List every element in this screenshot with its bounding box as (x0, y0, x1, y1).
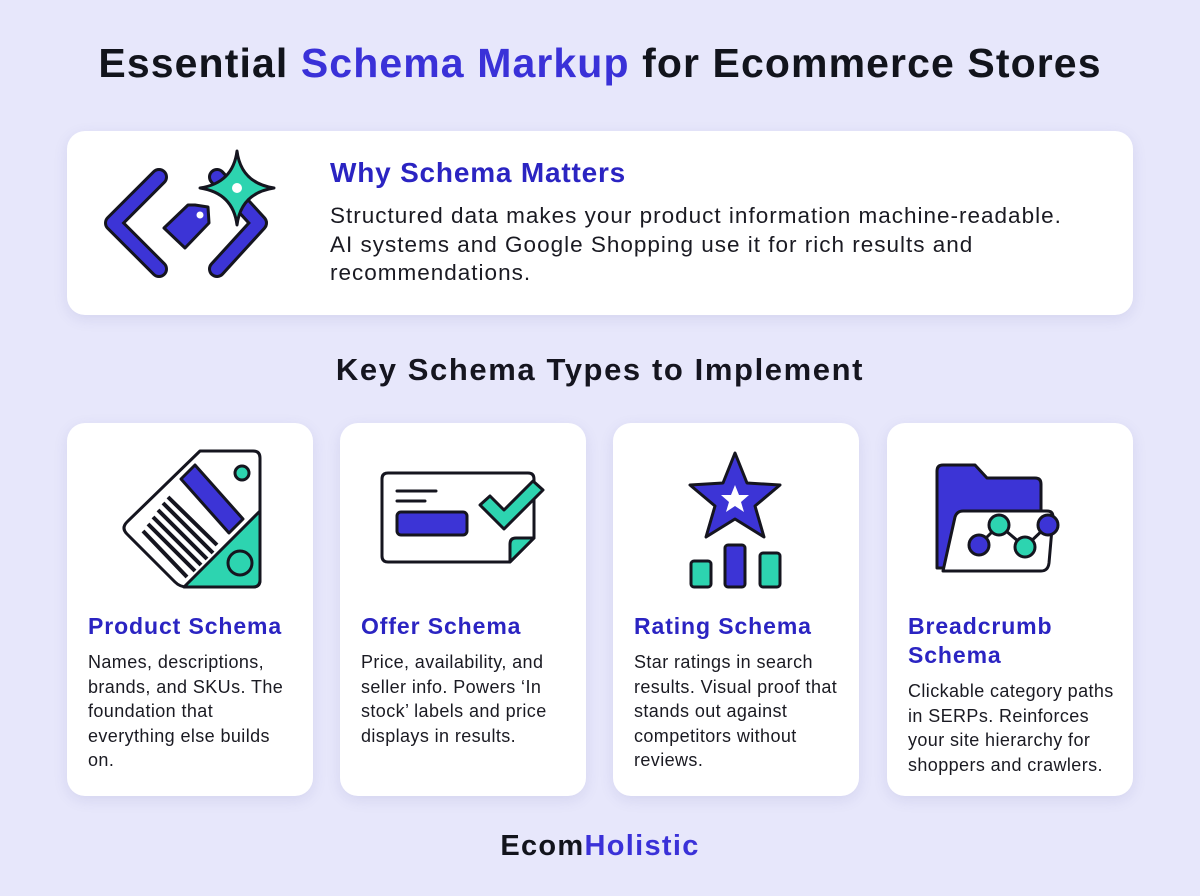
footer brand: EcomHolistic (500, 830, 700, 862)
heading: Breadcrumb Schema (908, 613, 1052, 668)
title: Essential Schema Markup for Ecommerce Stores (98, 40, 1102, 86)
card: rating schema (613, 423, 859, 796)
text: Clickable category paths in SERPs. Reinforces your site hierarchy for shoppers and crawlers. (908, 681, 1114, 774)
card: breadcrumb schema (887, 423, 1133, 796)
text: Star ratings in search results. Visual proof that stands out against competitors without reviews. (634, 652, 837, 770)
body text: Structured data makes your product information machine-readable. AI systems and Google Shopping use it for rich results and recommendations. (330, 203, 1062, 285)
icon: barcode tag (122, 450, 262, 588)
text: Names, descriptions, brands, and SKUs. The foundation that everything else builds on. (88, 652, 283, 770)
text: Price, availability, and seller info. Powers ‘In stock’ labels and price displays in results. (361, 652, 547, 746)
heading: Offer Schema (361, 613, 521, 639)
card: product schema (67, 423, 313, 796)
heading: Why Schema Matters (330, 157, 626, 188)
panel: why schema matters (67, 131, 1133, 315)
icon: star and bars (688, 452, 782, 588)
heading: Product Schema (88, 613, 282, 639)
icon: price card with checkmark (380, 472, 545, 564)
icon: code brackets with tag and sparkle (104, 150, 276, 278)
section heading: Key Schema Types to Implement (336, 352, 864, 387)
icon: folder with path nodes (936, 464, 1060, 572)
card: offer schema (340, 423, 586, 796)
heading: Rating Schema (634, 613, 812, 639)
